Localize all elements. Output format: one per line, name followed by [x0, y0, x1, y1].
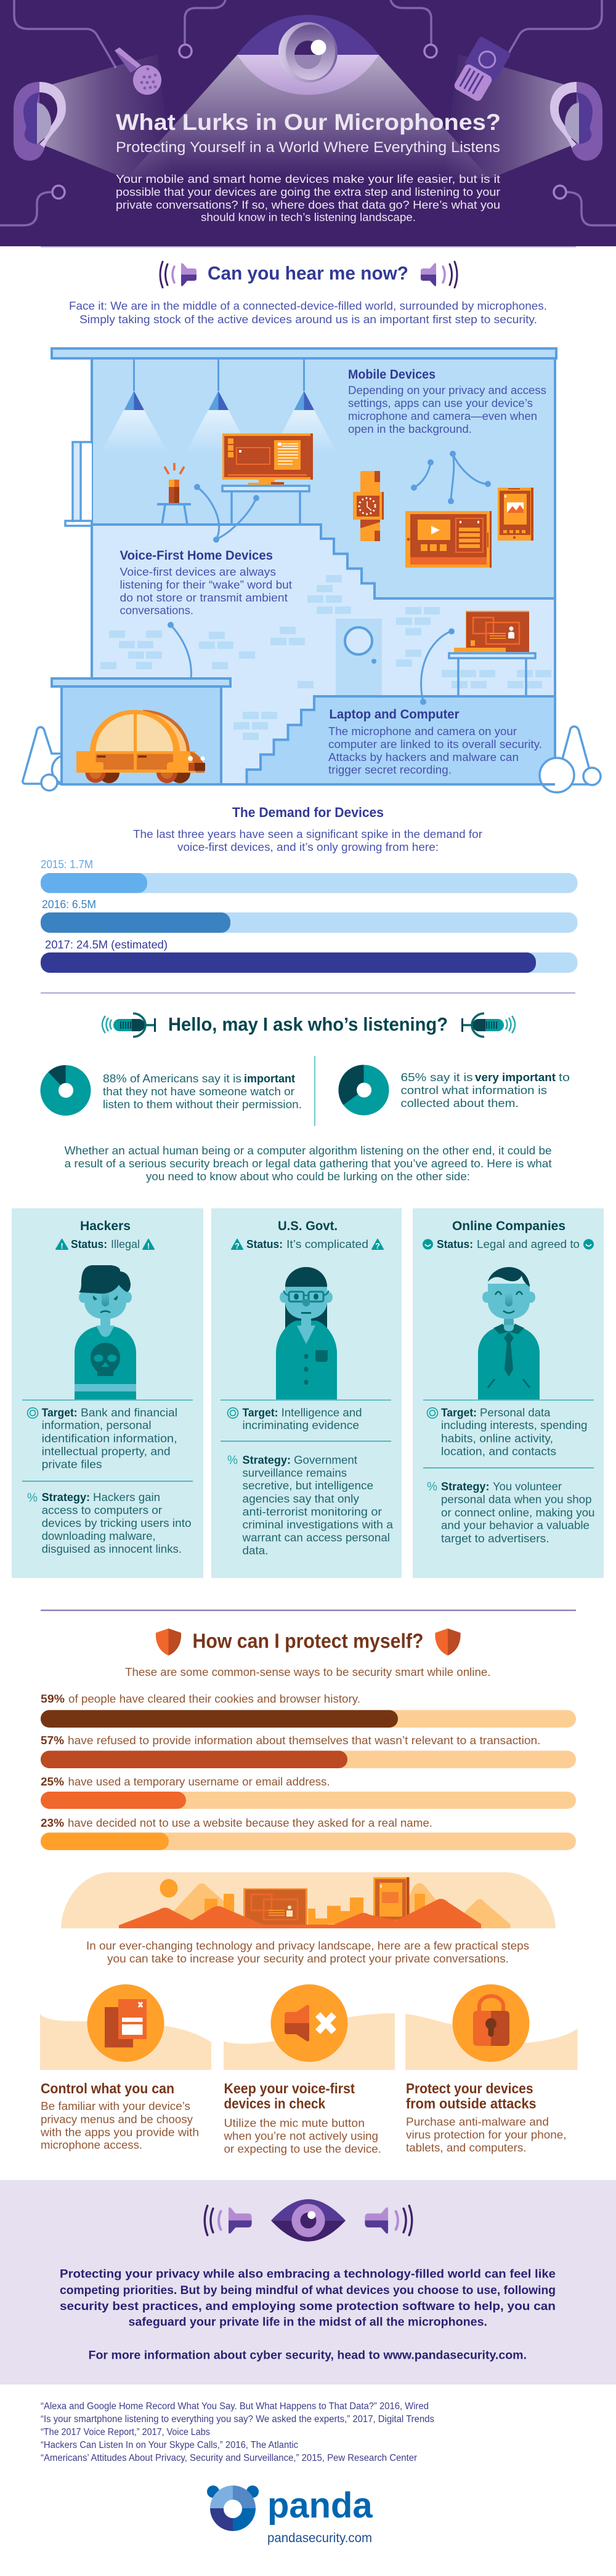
text block: practical steps	[86, 1939, 529, 1965]
panel: demand for devices	[41, 805, 578, 973]
bar: 2016	[41, 898, 578, 933]
icon: right speaker	[365, 2206, 412, 2235]
label: voice-first home devices	[120, 549, 292, 617]
target text: Bank and financial	[81, 1407, 177, 1419]
bar: 59 percent	[41, 1693, 576, 1728]
bar: 25 percent: 25%	[41, 1776, 64, 1788]
references: “Alexa and Google Home Record What You Say. But What Happens to That Data?” 2016, Wired	[41, 2401, 429, 2412]
strategy text: criminal investigations with a	[243, 1518, 394, 1531]
status	[56, 1238, 154, 1250]
references: “Hackers Can Listen In on Your Skype Calls,” 2016, The Atlantic	[41, 2440, 298, 2450]
label: voice-first home devices: Voice-first devices are always	[120, 566, 276, 578]
icon: target	[27, 1407, 38, 1419]
status: ?	[375, 1241, 380, 1250]
icon: left speaker	[160, 262, 197, 288]
stat text: 65 percent: collected about them.	[400, 1097, 519, 1109]
panel: house illustration	[23, 348, 601, 792]
status	[423, 1238, 594, 1250]
text block	[133, 828, 482, 853]
text block: The last three years have seen a significant spike in the demand for	[133, 828, 482, 840]
wall bricks	[100, 575, 551, 740]
bar: 2017: 2017: 24.5M (estimated)	[45, 939, 168, 951]
status: Legal and agreed to	[477, 1238, 580, 1250]
table with monitor	[222, 433, 313, 525]
arrow: wires to voice-first label	[194, 484, 259, 543]
target text: including interests, spending	[441, 1419, 588, 1431]
heading: from outside attacks	[406, 2096, 536, 2112]
label: voice-first home devices: listening for their “wake” word but	[120, 579, 292, 591]
icon: target	[228, 1407, 238, 1419]
icon: left shield	[156, 1628, 181, 1656]
label: mobile devices: open in the background.	[348, 423, 472, 435]
target text: Target:	[441, 1407, 477, 1419]
status	[232, 1238, 383, 1250]
intro text	[116, 173, 500, 223]
text block: conclusion: Protecting your privacy while also embracing a technology-filled world can feel like	[60, 2268, 556, 2281]
text block: voice-first devices, and it’s only growing from here:	[177, 841, 439, 853]
arrow: circuit cable top left to microphone	[14, 0, 116, 68]
label: laptop and computer: Attacks by hackers and malware can	[328, 751, 519, 763]
arrow: circuit cable bottom left	[0, 186, 65, 225]
status: Status:	[437, 1238, 473, 1250]
target text: incriminating evidence	[243, 1419, 359, 1431]
intro text: Your mobile and smart home devices make your life easier, but is it	[116, 173, 500, 185]
text block: privacy menus and be choosy	[41, 2114, 193, 2126]
text block: conclusion: competing priorities. But by being mindful of what devices you choose to use, following	[60, 2284, 556, 2297]
status: Illegal	[111, 1238, 140, 1250]
status: ?	[235, 1241, 240, 1250]
arrow: circuit cable top right inner	[391, 0, 437, 58]
target text: Intelligence and	[282, 1407, 362, 1419]
strategy text: access to computers or	[42, 1504, 162, 1516]
target text	[428, 1407, 588, 1458]
label: laptop and computer: Laptop and Computer	[329, 707, 460, 722]
target text: intellectual property, and	[42, 1446, 171, 1458]
icon: right shield	[435, 1628, 461, 1656]
target text: information, personal	[42, 1419, 152, 1431]
icon: walkie recorder	[451, 36, 511, 104]
bar: 25 percent: have used a temporary username or email address.	[68, 1776, 330, 1788]
banner: orange landscape	[61, 1872, 556, 1928]
label: mobile devices: microphone and camera—even when	[348, 410, 537, 422]
icon: right microphone	[461, 1013, 515, 1037]
icon: right speaker	[421, 262, 457, 288]
foreground hills	[119, 1899, 481, 1928]
references: “Is your smartphone listening to everything you say? We asked the experts,” 2017, Digital Trends	[41, 2414, 434, 2425]
stair block	[246, 696, 555, 784]
stat text: 65 percent: very important	[475, 1071, 556, 1084]
strategy text: devices by tricking users into	[42, 1517, 192, 1529]
heading	[224, 2080, 355, 2112]
text block: whether: a result of a serious security breach or legal data gathering that you’ve agreed to. Here is what	[65, 1157, 552, 1170]
bar: 23 percent: have decided not to use a website because they asked for a real name.	[68, 1817, 432, 1829]
strategy text: Strategy:	[42, 1491, 90, 1503]
label: laptop and computer	[328, 707, 542, 776]
icon: microphone	[115, 47, 161, 95]
strategy text: anti-terrorist monitoring or	[243, 1506, 382, 1518]
bar: 57 percent: 57%	[41, 1734, 64, 1747]
icon: left speaker	[205, 2206, 252, 2235]
strategy text: disguised as innocent links.	[42, 1543, 182, 1555]
text block: Utilize the mic mute button	[224, 2117, 365, 2130]
label: voice-first home devices: do not store or transmit ambient	[120, 592, 288, 604]
references	[41, 2401, 434, 2463]
label: laptop and computer: The microphone and camera on your	[328, 725, 517, 738]
icon: business man figure	[478, 1267, 540, 1401]
stat text: 88 percent: that they not have someone watch or	[103, 1085, 294, 1098]
target text: identification information,	[42, 1432, 177, 1444]
intro text: should know in tech’s listening landscape.	[201, 211, 416, 223]
strategy text	[227, 1454, 394, 1557]
icon: car	[76, 710, 205, 783]
icon: eye	[237, 15, 379, 95]
voice device on stool	[157, 463, 191, 525]
strategy text: warrant can access personal	[241, 1532, 390, 1544]
heading: how can i protect myself	[156, 1628, 461, 1656]
bar: 59 percent: of people have cleared their cookies and browser history.	[68, 1693, 360, 1705]
strategy text: Hackers gain	[93, 1491, 160, 1503]
ceiling lamps	[124, 358, 314, 410]
stat text: 88 percent	[103, 1073, 302, 1111]
icon: smartphone	[498, 488, 533, 541]
panel: hackers	[12, 1208, 203, 1578]
icon: percent: %	[27, 1491, 38, 1505]
text block: or expecting to use the device.	[224, 2143, 381, 2155]
pie chart: 65 percent	[338, 1065, 389, 1116]
light beam from eye	[126, 55, 490, 179]
icon: left ear	[14, 82, 66, 161]
heading	[406, 2080, 536, 2112]
panel: protect from outside attacks	[405, 1984, 578, 2154]
title: What Lurks in Our Microphones?	[116, 110, 501, 135]
bar: 2017	[41, 939, 578, 973]
label: laptop and computer: computer are linked to its overall security.	[328, 738, 542, 751]
strategy text	[27, 1491, 192, 1555]
icon: percent: %	[227, 1454, 238, 1467]
text block: microphone access.	[41, 2139, 142, 2151]
heading: Protect your devices	[406, 2080, 533, 2096]
stat text: 65 percent	[400, 1071, 570, 1109]
lamp beams	[100, 410, 338, 454]
heading text: Hello, may I ask who’s listening?	[168, 1013, 448, 1035]
light beam right ear	[444, 54, 577, 179]
heading: The Demand for Devices	[232, 805, 384, 820]
icon: app windows	[87, 1984, 164, 2062]
icon: muted speaker	[271, 1984, 347, 2062]
text block: Purchase anti-malware and	[406, 2115, 549, 2128]
strategy text: Strategy:	[441, 1480, 489, 1492]
strategy text: personal data when you shop	[441, 1494, 591, 1506]
panel: us government	[211, 1208, 402, 1578]
bar: 23 percent: 23%	[41, 1817, 64, 1829]
bar: 57 percent	[41, 1734, 576, 1768]
text block	[40, 2100, 199, 2151]
heading: can you hear me now	[160, 262, 457, 288]
label: mobile devices: Depending on your privacy and access	[348, 384, 546, 396]
target text	[27, 1407, 177, 1470]
arrow: wires to mobile devices	[411, 451, 491, 504]
arrow: circuit cable bottom right	[554, 186, 616, 225]
strategy text: data.	[243, 1545, 269, 1557]
text block: practical steps: In our ever-changing technology and privacy landscape, here are a few practical steps	[86, 1939, 529, 1952]
trees right	[540, 727, 601, 792]
strategy text: surveillance remains	[243, 1467, 347, 1479]
heading: Online Companies	[452, 1219, 565, 1233]
icon: government agent figure	[276, 1267, 337, 1401]
status: Status:	[246, 1238, 283, 1250]
text block: with the apps you provide with	[40, 2127, 199, 2139]
target text: Target:	[243, 1407, 278, 1419]
text block	[406, 2115, 567, 2154]
text block: when you’re not actively using	[223, 2130, 378, 2143]
stat text: 88 percent: 88% of Americans say it is	[103, 1073, 241, 1085]
target text: Personal data	[480, 1407, 551, 1419]
arrow: circuit cable top right to walkie	[502, 0, 602, 65]
icon: phone silhouette	[373, 1877, 409, 1922]
intro text: face it: Face it: We are in the middle of a connected-device-filled world, surrounded by microphones.	[69, 300, 547, 312]
label: mobile devices: Mobile Devices	[348, 368, 436, 382]
heading: hello may i ask	[102, 1013, 515, 1037]
door	[336, 619, 382, 696]
strategy text: target to advertisers.	[441, 1532, 549, 1545]
strategy text: and your behavior a valuable	[441, 1519, 590, 1532]
outer wall lines	[92, 358, 555, 784]
label: mobile devices: settings, apps can use your device’s	[348, 397, 533, 409]
intro text: private conversations? If so, where does that data go? Here’s what you	[116, 199, 500, 211]
references: “Americans’ Attitudes About Privacy, Security and Surveillance,” 2015, Pew Research Center	[41, 2453, 417, 2463]
text block: practical steps: you can take to increase your security and protect your private conversations.	[107, 1953, 509, 1965]
status: Status:	[71, 1238, 107, 1250]
strategy text: agencies say that only	[243, 1492, 359, 1505]
target text: location, and contacts	[441, 1446, 556, 1458]
status: !	[60, 1241, 63, 1250]
stat text: 88 percent: important	[244, 1073, 295, 1085]
arrow: wire voice-first to car	[168, 622, 191, 704]
panel: online companies	[413, 1208, 604, 1578]
text block: conclusion: security best practices, and employing some protection software to help, you can	[60, 2300, 556, 2313]
panel: control what you can	[40, 1984, 211, 2151]
table with laptop	[449, 611, 535, 696]
target text	[228, 1407, 362, 1431]
bar: 2015: 2015: 1.7M	[41, 858, 93, 871]
heading: Control what you can	[41, 2080, 174, 2096]
strategy text: Strategy:	[243, 1454, 291, 1466]
icon: tablet	[405, 511, 492, 568]
strategy text: or connect online, making you	[441, 1507, 595, 1519]
trees left	[23, 727, 62, 791]
panel: voice-first devices in check	[223, 1984, 395, 2155]
stat text: 65 percent: to	[559, 1071, 570, 1084]
target text: habits, online activity,	[441, 1432, 553, 1444]
label: mobile devices	[348, 368, 546, 435]
panel: header	[0, 0, 616, 248]
icon: right ear	[550, 82, 602, 161]
strategy text	[427, 1480, 595, 1545]
heading text: How can I protect myself?	[192, 1629, 424, 1652]
strategy text: downloading malware,	[42, 1530, 156, 1542]
roof	[52, 348, 556, 358]
pie chart: 88 percent	[41, 1065, 91, 1116]
icon: laptop silhouette	[243, 1888, 307, 1925]
heading text: Can you hear me now?	[208, 262, 408, 284]
text block: virus protection for your phone,	[406, 2129, 567, 2141]
stat text: 65 percent: control what information is	[400, 1084, 547, 1097]
text block: whether: Whether an actual human being or a computer algorithm listening on the other end, it could be	[65, 1145, 552, 1157]
stat text: 65 percent: 65% say it is	[400, 1071, 473, 1084]
bar chart: security habits	[41, 1693, 576, 1850]
strategy text: You volunteer	[493, 1480, 562, 1492]
call to action: For more information about cyber security, head to www.pandasecurity.com.	[89, 2349, 527, 2362]
strategy text: Government	[294, 1454, 357, 1466]
arrow: wire to laptop	[420, 628, 455, 705]
intro text: possible that your devices are going the extra step and listening to your	[116, 186, 500, 198]
text block: common sense: These are some common-sense ways to be security smart while online.	[125, 1666, 490, 1678]
strategy text: secretive, but intelligence	[243, 1479, 373, 1492]
text block: Be familiar with your device’s	[41, 2100, 190, 2112]
text block: conclusion: safeguard your private life in the midst of all the microphones.	[128, 2316, 487, 2329]
intro text: face it: Simply taking stock of the active devices around us is an important first step to security.	[79, 313, 537, 326]
icon: eye	[271, 2199, 346, 2242]
references: “The 2017 Voice Report,” 2017, Voice Labs	[41, 2427, 210, 2437]
status: It’s complicated	[286, 1238, 368, 1250]
text block: whether	[65, 1145, 552, 1183]
icon: percent: %	[427, 1480, 437, 1494]
garage	[52, 678, 230, 784]
url: pandasecurity.com	[267, 2531, 372, 2545]
arrow: circuit cable top left inner	[179, 0, 225, 58]
floor line	[92, 523, 321, 526]
bar: 57 percent: have refused to provide information about themselves that wasn’t relevant to a transaction.	[68, 1734, 541, 1747]
status: !	[147, 1241, 150, 1250]
intro text: face it	[69, 300, 547, 326]
stat text: 88 percent: listen to them without their permission.	[103, 1098, 302, 1111]
text block	[223, 2117, 381, 2155]
icon: left microphone	[102, 1013, 156, 1037]
heading: devices in check	[224, 2096, 325, 2112]
heading: Hackers	[80, 1219, 131, 1233]
target text: private files	[42, 1458, 102, 1470]
balcony window	[65, 442, 92, 526]
icon: hacker figure	[75, 1265, 136, 1401]
label: voice-first home devices: Voice-First Home Devices	[120, 549, 273, 563]
icon: target	[428, 1407, 437, 1419]
bar: 25 percent	[41, 1776, 576, 1809]
bar: 2016: 2016: 6.5M	[42, 898, 96, 911]
text block: tablets, and computers.	[406, 2141, 526, 2154]
bar: 23 percent	[41, 1817, 576, 1850]
text block: whether: you need to know about who could be lurking on the other side:	[146, 1170, 470, 1183]
icon: smartwatch	[353, 471, 384, 541]
icon: panda mark	[207, 2485, 259, 2531]
label: voice-first home devices: conversations.	[120, 605, 193, 617]
target text: Target:	[42, 1407, 78, 1419]
bar: 59 percent: 59%	[41, 1693, 65, 1705]
upper room	[92, 358, 555, 598]
panel: conclusion	[0, 2180, 616, 2385]
light beam left ear	[39, 54, 172, 179]
text block: conclusion	[60, 2268, 556, 2329]
wordmark: panda	[267, 2485, 373, 2526]
panel: survey statistics	[41, 1056, 570, 1183]
logo: panda	[207, 2485, 373, 2545]
heading: Keep your voice-first	[224, 2080, 355, 2096]
floor	[62, 783, 555, 786]
bar: 2015	[41, 858, 578, 893]
subtitle: Protecting Yourself in a World Where Everything Listens	[116, 139, 500, 156]
heading: U.S. Govt.	[278, 1219, 338, 1233]
label: laptop and computer: trigger secret recording.	[328, 764, 452, 776]
icon: padlock	[452, 1984, 530, 2062]
